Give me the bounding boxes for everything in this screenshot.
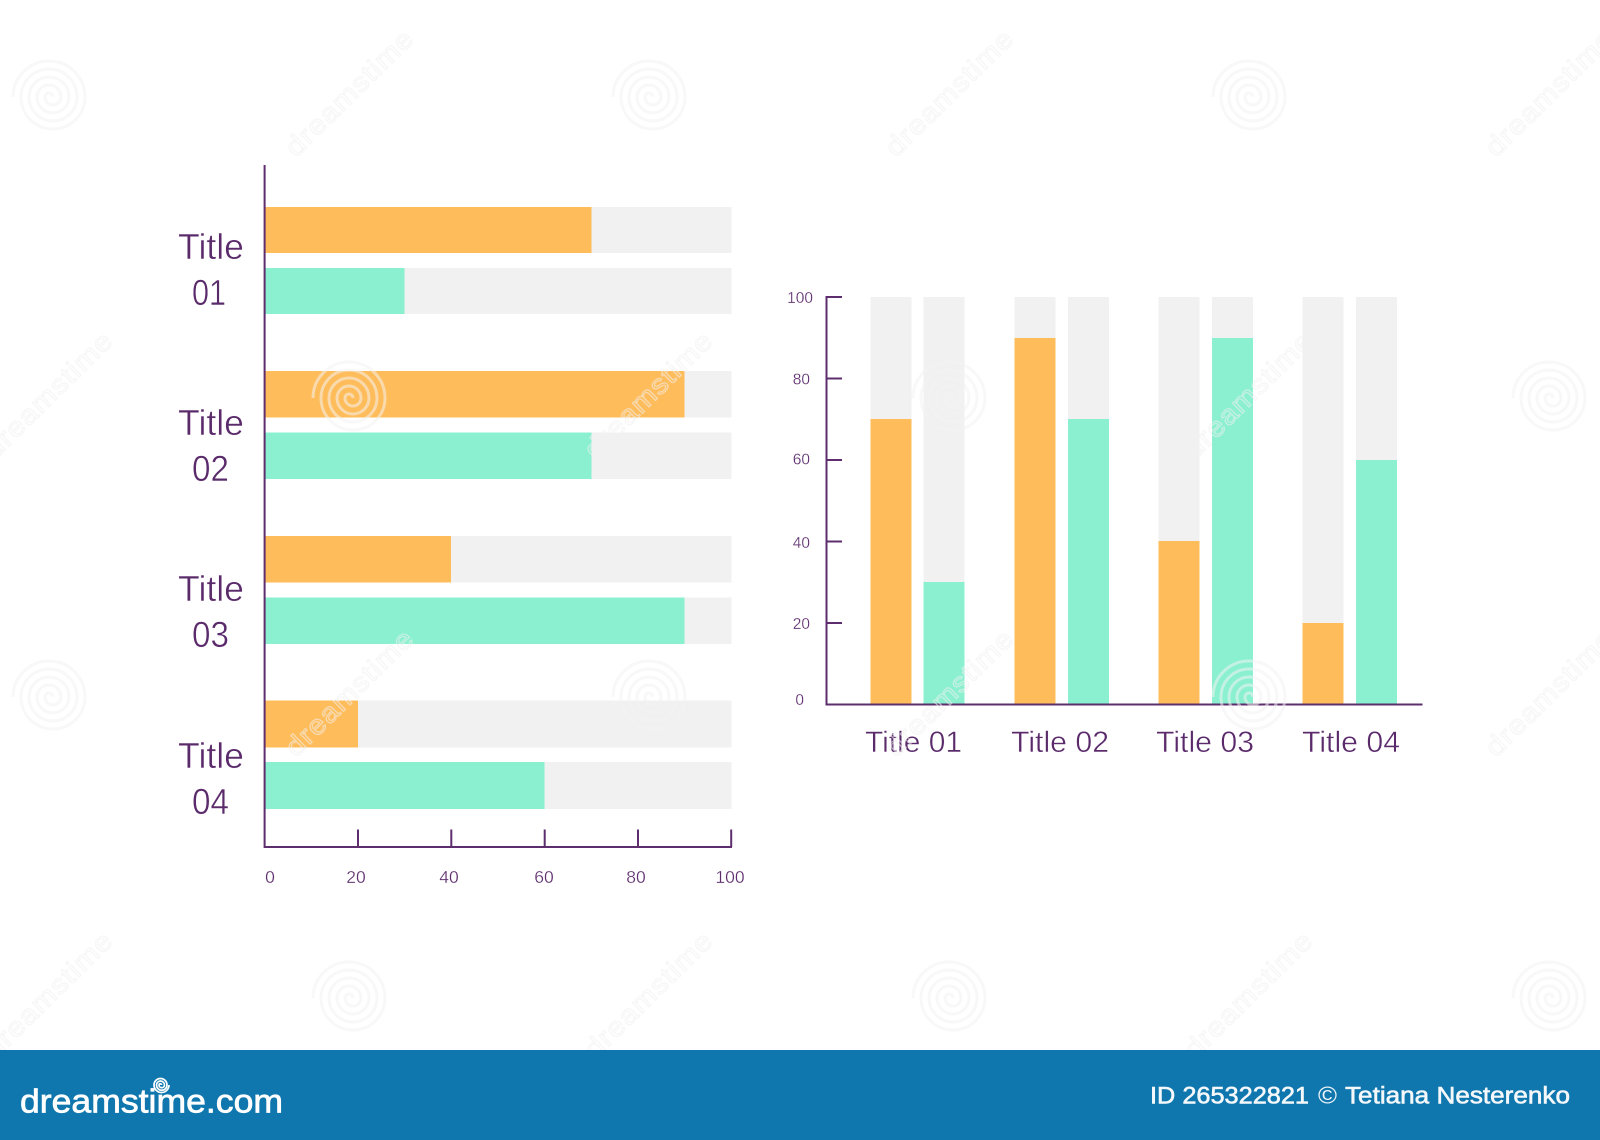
panel: horizontal bar chart [178, 165, 745, 887]
footer credit: ID 265322821 [1150, 1082, 1309, 1110]
x axis values: 80 [626, 867, 646, 887]
y axis values [787, 290, 813, 709]
column labels [865, 726, 1400, 759]
footer credit [1150, 1082, 1570, 1110]
column labels: Title 04 [1302, 726, 1400, 759]
footer credit: © [1318, 1082, 1337, 1110]
y axis values: 40 [793, 535, 810, 552]
group 2 columns [1014, 297, 1109, 704]
footer bar [0, 1050, 1600, 1140]
column labels: Title 02 [1011, 726, 1109, 759]
watermark text: dreamstime [279, 623, 420, 762]
panel: vertical bar chart [787, 290, 1422, 759]
x axis values [265, 867, 745, 887]
group 2 bars [265, 371, 732, 479]
row labels: Title [178, 568, 244, 609]
x axis values: 20 [346, 867, 366, 887]
y axis values: 60 [793, 452, 810, 468]
icon: logo spiral [154, 1078, 169, 1092]
row labels [178, 226, 244, 822]
group 4 columns [1302, 297, 1397, 704]
watermark text: dreamstime [578, 925, 719, 1064]
row labels: 04 [192, 781, 229, 822]
column labels: Title 03 [1156, 726, 1254, 759]
group 1 columns [870, 297, 964, 704]
column labels: Title 01 [865, 726, 962, 759]
axes [826, 297, 1422, 704]
watermark text: dreamstime [1178, 925, 1319, 1064]
footer credit: Tetiana Nesterenko [1345, 1082, 1570, 1110]
row labels: 01 [192, 272, 226, 313]
row labels: Title [178, 402, 244, 443]
row labels: Title [178, 735, 244, 776]
watermark text: dreamstime [879, 623, 1020, 762]
y axis values: 100 [787, 290, 813, 307]
group 1 bars [265, 207, 732, 314]
x axis values: 0 [265, 867, 275, 887]
watermark text: dreamstime [578, 325, 719, 464]
group 3 columns [1158, 297, 1253, 704]
group 3 bars [265, 536, 732, 644]
row labels: Title [178, 226, 244, 267]
y axis values: 20 [793, 616, 810, 633]
watermark text: dreamstime [279, 23, 420, 162]
x axis values: 40 [439, 867, 459, 887]
row labels: 02 [192, 448, 229, 489]
axes [265, 165, 732, 847]
y axis values: 0 [795, 692, 804, 709]
footer logo text: dreamstime.com [20, 1082, 283, 1120]
x axis values: 60 [534, 867, 554, 887]
watermark text: dreamstime [1178, 325, 1319, 464]
row labels: 03 [192, 614, 229, 655]
group 4 bars [265, 700, 732, 809]
x axis values: 100 [715, 867, 745, 887]
watermark text: dreamstime [879, 23, 1020, 162]
y axis values: 80 [793, 372, 810, 388]
